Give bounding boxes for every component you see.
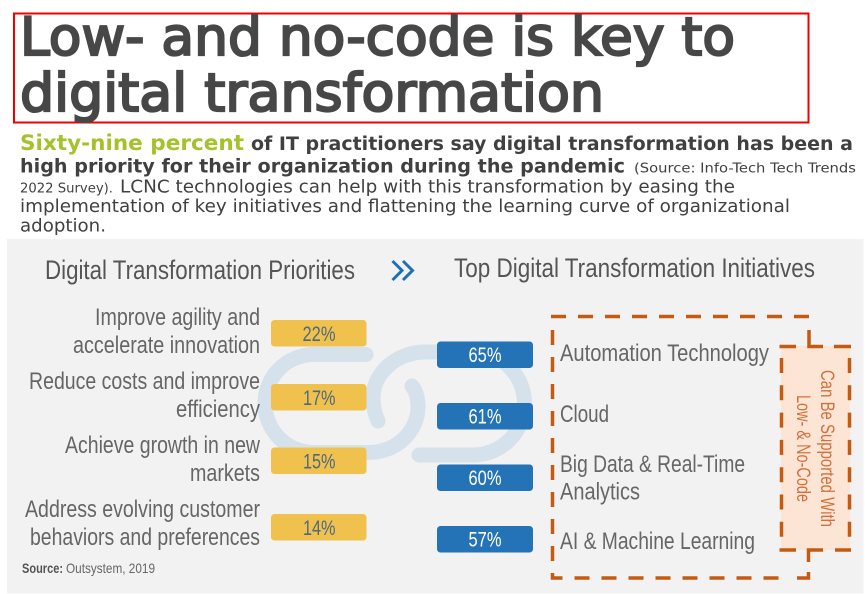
initiative values: 57% xyxy=(468,528,502,552)
initiative bars xyxy=(437,342,533,552)
priority values: 14% xyxy=(303,517,336,540)
priority labels: efficiency xyxy=(176,396,260,423)
initiative labels: Automation Technology xyxy=(560,340,769,367)
priority labels: markets xyxy=(190,460,260,487)
initiative values: 60% xyxy=(468,467,502,490)
priority values: 17% xyxy=(303,387,336,410)
intro paragraph: implementation of key initiatives and flattening the learning curve of organizational xyxy=(20,197,790,217)
priority labels: Achieve growth in new xyxy=(65,432,261,459)
title text: digital transformation xyxy=(20,63,604,124)
priority values: 15% xyxy=(303,450,336,474)
callout text xyxy=(792,370,837,527)
priority labels: Reduce costs and improve xyxy=(29,368,260,395)
intro paragraph: of IT practitioners say digital transformation has been a xyxy=(251,134,853,155)
dashed box around initiatives xyxy=(551,316,810,578)
panel: charts background xyxy=(7,239,864,594)
source note: Source: xyxy=(22,560,63,576)
priority bars xyxy=(271,320,366,540)
icon: double chevron arrow xyxy=(392,261,412,280)
callout text: Can Be Supported With xyxy=(816,370,837,527)
source note: Outsystem, 2019 xyxy=(66,560,155,576)
priority labels xyxy=(25,304,261,551)
icon: chain link watermark xyxy=(265,352,524,455)
initiative values xyxy=(468,344,502,552)
priority values xyxy=(302,323,336,540)
priority labels: behaviors and preferences xyxy=(30,524,260,551)
priority labels: accelerate innovation xyxy=(73,332,260,359)
initiative values: 65% xyxy=(468,344,502,367)
source note xyxy=(22,560,155,576)
intro paragraph: LCNC technologies can help with this transformation by easing the xyxy=(120,178,735,198)
initiative values: 61% xyxy=(468,406,502,428)
intro paragraph: (Source: Info-Tech Tech Trends xyxy=(634,160,856,176)
initiative labels: Big Data & Real-Time xyxy=(560,451,745,478)
initiative labels xyxy=(560,340,769,555)
title text xyxy=(20,7,735,124)
priority labels: Address evolving customer xyxy=(25,496,260,523)
intro paragraph: 2022 Survey). xyxy=(20,180,113,196)
title box xyxy=(14,7,808,124)
priority values: 22% xyxy=(302,323,336,346)
intro paragraph: adoption. xyxy=(20,216,106,236)
intro paragraph: high priority for their organization during the pandemic xyxy=(20,156,625,178)
intro paragraph: Sixty-nine percent xyxy=(20,131,244,155)
title text: Low- and no-code is key to xyxy=(20,7,735,68)
callout text: Low- & No-Code xyxy=(792,395,813,502)
heading: digital transformation priorities: Digital Transformation Priorities xyxy=(45,255,355,285)
initiative labels: AI & Machine Learning xyxy=(560,528,755,555)
initiative labels: Analytics xyxy=(560,478,640,506)
callout: can be supported with low- and no-code xyxy=(780,330,851,562)
priority labels: Improve agility and xyxy=(95,304,260,331)
initiative labels: Cloud xyxy=(560,401,609,428)
intro paragraph xyxy=(20,131,856,236)
